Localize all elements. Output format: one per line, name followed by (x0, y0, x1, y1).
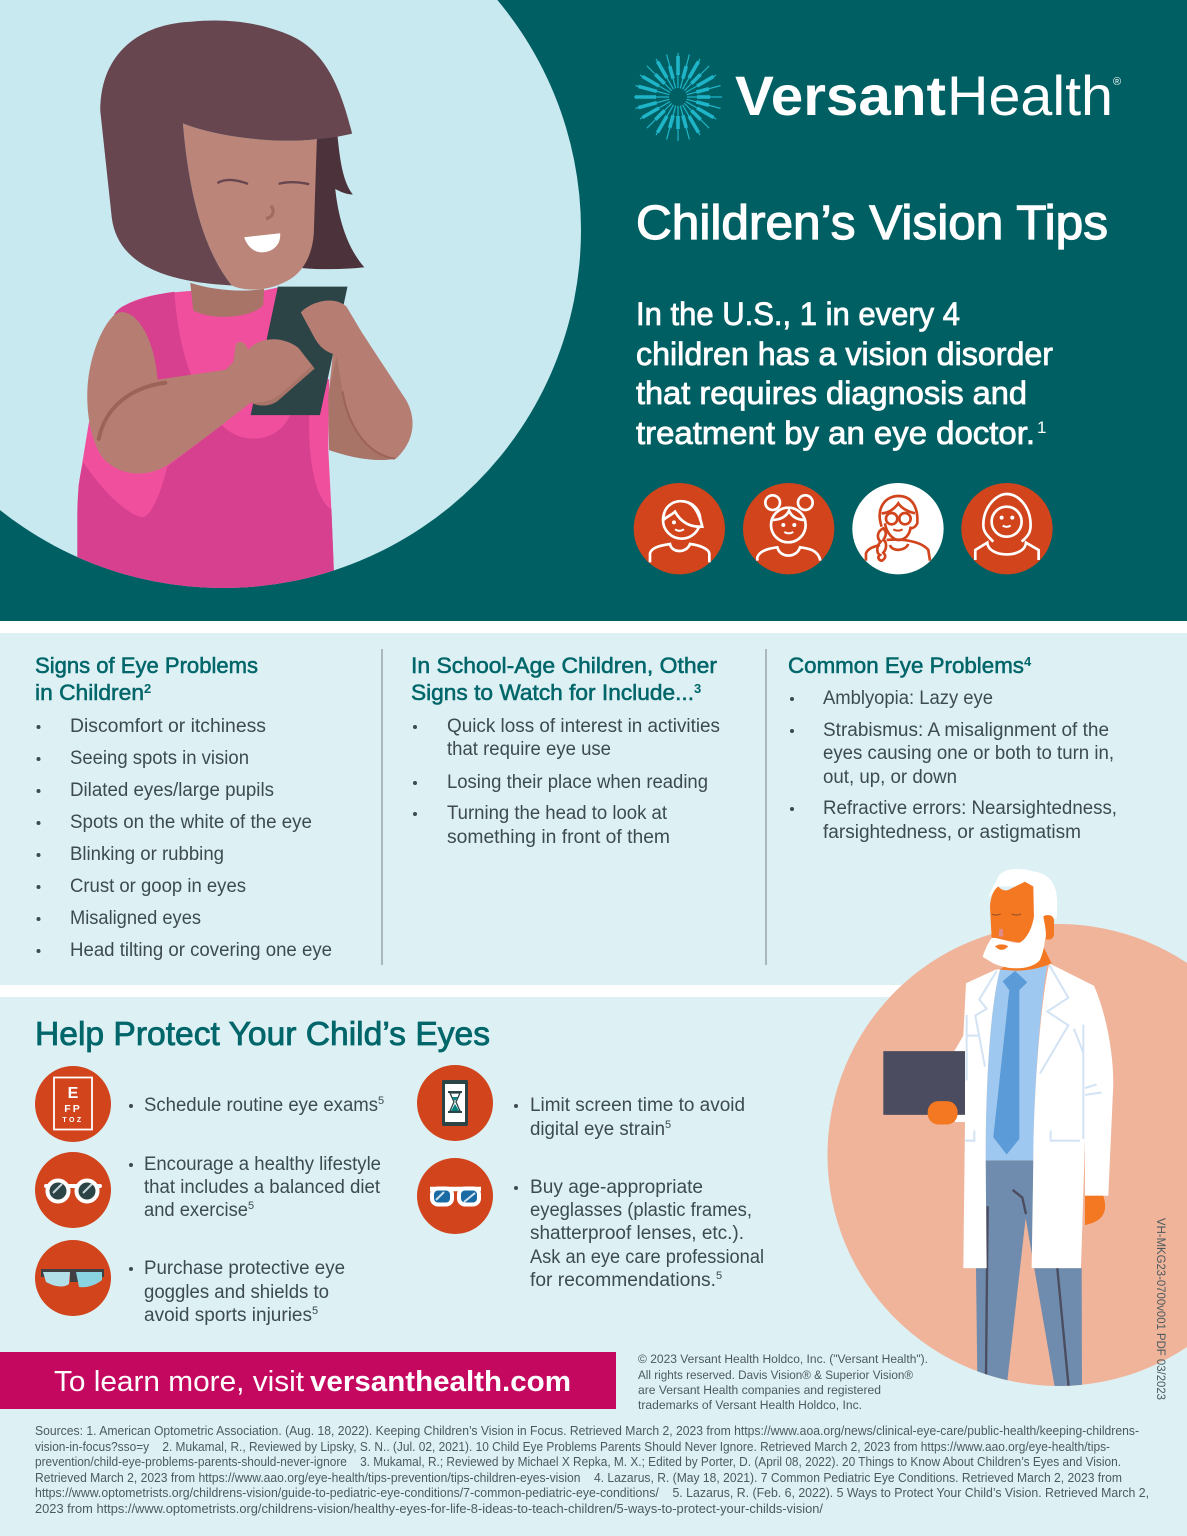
panel: school-age signs: Turning the head to look at (447, 803, 668, 824)
panel: common eye problems: Refractive errors: Nearsightedness, (823, 798, 1117, 819)
sources: 2023 from https://www.optometrists.org/childrens-vision/healthy-eyes-for-life-8-ideas-to-teach-children/5-ways-to-protect-your-childs-vision/ (35, 1502, 824, 1516)
text: left tips: avoid sports injuries (144, 1305, 312, 1326)
icon: round glasses (35, 1152, 111, 1228)
panel: signs of eye problems: Spots on the white of the eye (70, 812, 312, 833)
sources (35, 1424, 1149, 1516)
text: left tips: Schedule routine eye exams (144, 1095, 378, 1116)
icon: eye chart (35, 1066, 111, 1142)
icon: kids glasses (417, 1158, 493, 1234)
copyright: All rights reserved. Davis Vision® & Superior Vision® (638, 1368, 913, 1382)
column dividers (382, 649, 766, 965)
panel: common eye problems: Common Eye Problems (788, 653, 1024, 678)
panel: common eye problems: 4 (1024, 654, 1032, 669)
icons: four children (634, 483, 1053, 574)
white divider band lower (0, 985, 910, 997)
panel: school-age signs: Quick loss of interest in activities (447, 716, 720, 737)
icon: child 1 (634, 483, 725, 574)
panel: common eye problems (788, 653, 1117, 843)
icon: eye chart: FP (64, 1103, 82, 1115)
text: left tips: 5 (312, 1305, 318, 1317)
white divider band (0, 621, 1187, 633)
illustration: girl with phone (77, 21, 413, 601)
logo wordmark: ® (1113, 76, 1121, 88)
copyright: trademarks of Versant Health Holdco, Inc. (638, 1398, 862, 1412)
sources: https://www.optometrists.org/childrens-vision/guide-to-pediatric-eye-conditions/7-common-pediatric-eye-conditions/ 5. Lazarus, R. (Feb. 6, 2022). 5 Ways to Protect Your Child’s Vision. Retrieved March 2, (35, 1486, 1149, 1500)
banner: learn more: versanthealth.com (310, 1366, 571, 1398)
panel: signs of eye problems: Head tilting or covering one eye (70, 940, 332, 961)
panel: school-age signs: In School-Age Children, Other (411, 653, 718, 678)
text: right tips: shatterproof lenses, etc.). (530, 1223, 744, 1244)
panel: signs of eye problems: Crust or goop in eyes (70, 876, 246, 897)
panel: common eye problems: farsightedness, or astigmatism (823, 822, 1081, 843)
icon: protective goggles (35, 1240, 111, 1316)
panel: school-age signs: Signs to Watch for Include... (411, 680, 694, 705)
logo: Versant Health burst (634, 53, 722, 141)
sources: Sources: 1. American Optometric Association. (Aug. 18, 2022). Keeping Children’s Vision in Focus. Retrieved March 2, 2023 from https://www.aoa.org/news/clinical-eye-care/public-health/keeping-childrens- (35, 1424, 1139, 1438)
panel: school-age signs: something in front of them (447, 827, 670, 848)
text: right tips: Ask an eye care professional (530, 1247, 764, 1268)
intro statement: that requires diagnosis and (636, 375, 1027, 411)
panel: common eye problems: Strabismus: A misalignment of the (823, 720, 1109, 741)
text: right tips: 5 (665, 1119, 671, 1131)
text: left tips: and exercise (144, 1200, 248, 1221)
panel: school-age signs: 3 (694, 681, 701, 696)
text: right tips: for recommendations. (530, 1270, 716, 1291)
intro statement (636, 296, 1053, 451)
panel: common eye problems: out, up, or down (823, 767, 957, 788)
text: left tips: that includes a balanced diet (144, 1177, 381, 1198)
panel: signs of eye problems: Signs of Eye Problems (35, 653, 258, 678)
sources: vision-in-focus?sso=y 2. Mukamal, R., Reviewed by Lipsky, S. N.. (Jul. 02, 2021). 10 Child Eye Problems Parents Should Never Ignore. Retrieved March 2, 2023 from https://www.aao.org/eye-health/tips- (35, 1440, 1110, 1454)
text: left tips: Encourage a healthy lifestyle (144, 1154, 381, 1175)
sources: prevention/child-eye-problems-parents-should-never-ignore 3. Mukamal, R.; Reviewed by Michael X Repka, M. X.; Edited by Porter, D. (April 08, 2022). 20 Things to Know About Children’s Eyes and Vision. (35, 1455, 1121, 1469)
icon: child 2 (743, 483, 834, 574)
text: left tips: 5 (248, 1200, 254, 1212)
panel: signs of eye problems: Misaligned eyes (70, 908, 201, 929)
icon: phone hourglass (417, 1065, 493, 1141)
copyright: are Versant Health companies and registered (638, 1383, 881, 1397)
banner: learn more: To learn more, visit (54, 1366, 304, 1398)
job code: VH-MKG23-0700v001 PDF 03/2023 (1154, 1218, 1166, 1400)
text: right tips: digital eye strain (530, 1119, 665, 1140)
panel: school-age signs (411, 653, 720, 848)
text: right tips: 5 (716, 1270, 722, 1282)
panel: signs of eye problems: Dilated eyes/large pupils (70, 780, 274, 801)
panel: common eye problems: eyes causing one or both to turn in, (823, 743, 1114, 764)
intro statement: 1 (1037, 418, 1046, 437)
panel: signs of eye problems: Blinking or rubbing (70, 844, 224, 865)
panel: signs of eye problems: 2 (144, 681, 151, 696)
icon: child 4 (961, 483, 1053, 574)
panel: school-age signs: Losing their place when reading (447, 772, 708, 793)
banner: learn more (0, 1352, 616, 1409)
light blue circle behind girl (0, 0, 581, 588)
icon: eye chart: E (68, 1085, 79, 1102)
illustration: doctor (883, 869, 1113, 1390)
sources: Retrieved March 2, 2023 from https://www.aao.org/eye-health/tips-prevention/tips-children-eyes-vision 4. Lazarus, R. (May 18, 2021). 7 Common Pediatric Eye Conditions. Retrieved March 2, 2023 from (35, 1471, 1122, 1485)
intro statement: In the U.S., 1 in every 4 (636, 296, 960, 332)
panel: signs of eye problems (35, 653, 332, 961)
panel: signs of eye problems: in Children (35, 680, 144, 705)
title: Children’s Vision Tips (636, 197, 1108, 250)
text: right tips: eyeglasses (plastic frames, (530, 1200, 752, 1221)
heading: help protect: Help Protect Your Child’s Eyes (35, 1015, 490, 1052)
intro statement: treatment by an eye doctor. (636, 415, 1035, 451)
copyright (638, 1352, 928, 1412)
panel: signs of eye problems: Seeing spots in vision (70, 748, 249, 769)
intro statement: children has a vision disorder (636, 336, 1053, 372)
text: left tips: Purchase protective eye (144, 1258, 345, 1279)
text: left tips: 5 (378, 1095, 384, 1107)
panel: signs of eye problems: Discomfort or itchiness (70, 716, 266, 737)
text: left tips (129, 1095, 384, 1326)
text: right tips: Buy age-appropriate (530, 1177, 703, 1198)
panel: teal header (0, 0, 1187, 621)
logo wordmark: Health (947, 64, 1113, 127)
text: right tips: Limit screen time to avoid (530, 1095, 745, 1116)
panel: school-age signs: that require eye use (447, 739, 611, 760)
text: left tips: goggles and shields to (144, 1282, 329, 1303)
logo wordmark: Versant (735, 64, 946, 127)
peach circle behind doctor (828, 924, 1187, 1386)
text: right tips (514, 1095, 764, 1291)
icon: eye chart: TOZ (62, 1117, 84, 1124)
logo wordmark (735, 64, 1121, 127)
copyright: © 2023 Versant Health Holdco, Inc. ("Versant Health"). (638, 1352, 928, 1366)
icon: child 3 (852, 483, 944, 574)
panel: common eye problems: Amblyopia: Lazy eye (823, 688, 993, 709)
